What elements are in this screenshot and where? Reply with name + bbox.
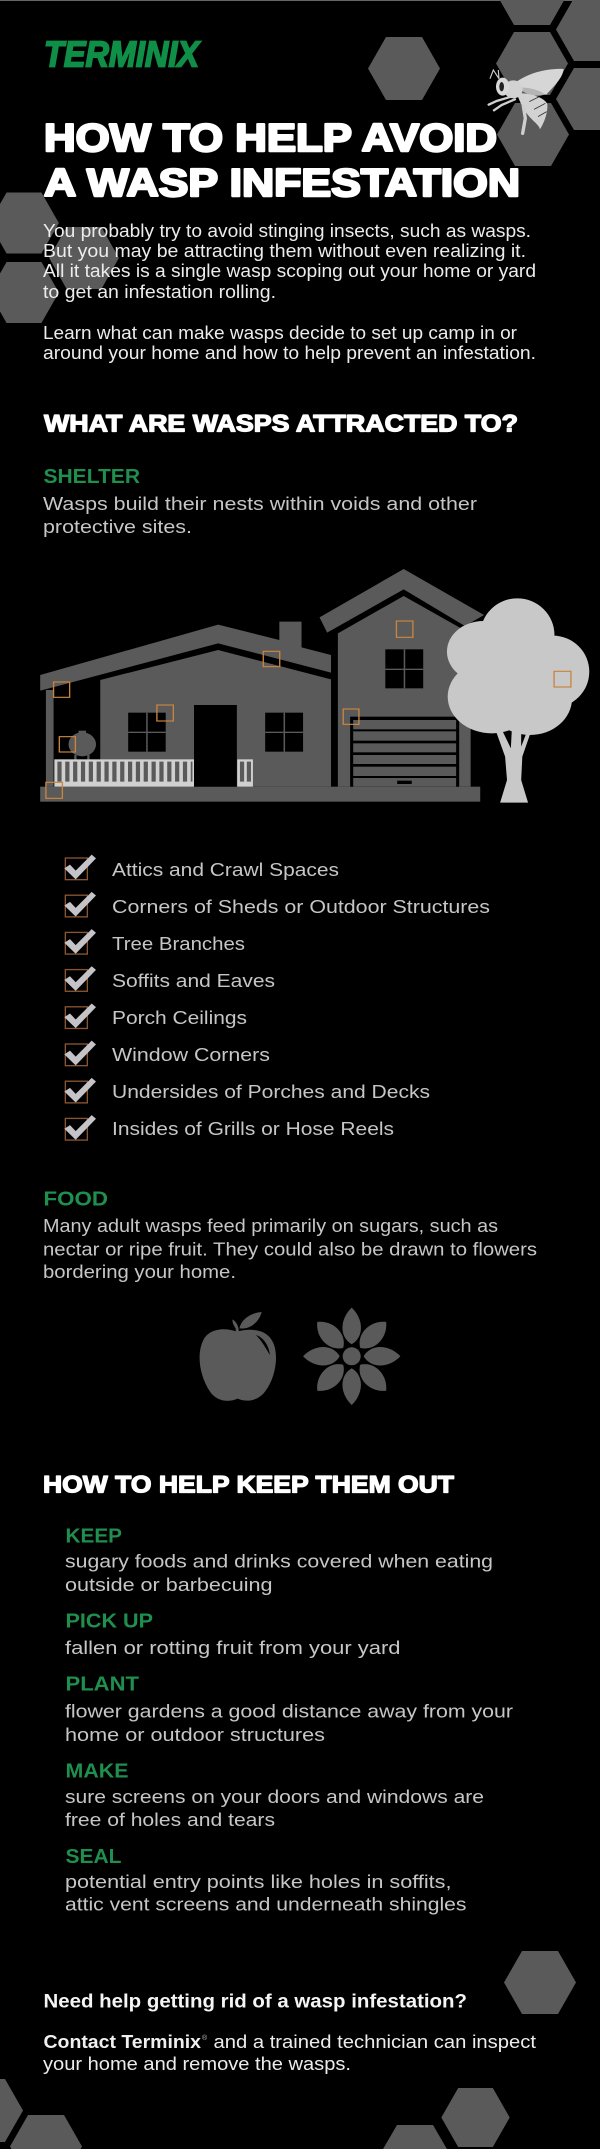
- tip: make: MAKE: [66, 1760, 128, 1782]
- check item: attics: [64, 855, 339, 880]
- check item: window corners: [64, 1041, 270, 1066]
- tip: keep: KEEP: [66, 1526, 122, 1548]
- check item: undersides: Undersides of Porches and Decks: [112, 1081, 430, 1102]
- tip: make: [65, 1760, 484, 1830]
- check item: window corners: Window Corners: [112, 1044, 270, 1065]
- shelter text: protective sites.: [43, 516, 192, 537]
- icon: grill: [68, 731, 96, 760]
- intro text: You probably try to avoid stinging insects, such as wasps.: [43, 221, 531, 241]
- check item: grills: Insides of Grills or Hose Reels: [112, 1118, 394, 1139]
- cta text: Contact Terminix: [44, 2032, 201, 2052]
- food text: [43, 1215, 537, 1282]
- check item: soffits: [64, 966, 275, 991]
- shelter text: Wasps build their nests within voids and other: [43, 493, 477, 514]
- tip: plant: [65, 1674, 513, 1745]
- tips list: [65, 1526, 513, 1914]
- heading: what are wasps attracted to: WHAT ARE WASPS ATTRACTED TO?: [44, 410, 518, 438]
- icon: wasp: [489, 69, 564, 133]
- tip: seal: attic vent screens and underneath shingles: [65, 1894, 466, 1914]
- subheading: shelter: SHELTER: [44, 466, 141, 488]
- icon: apple: [200, 1312, 276, 1401]
- check item: attics: Attics and Crawl Spaces: [112, 859, 339, 880]
- logo: Terminix: TERMINIX: [44, 34, 201, 74]
- check item: tree branches: [64, 929, 245, 954]
- tip: pick up: [65, 1610, 400, 1658]
- tip: keep: outside or barbecuing: [65, 1574, 272, 1595]
- honeycomb: footer right: [379, 1951, 576, 2149]
- tip: make: free of holes and tears: [65, 1809, 275, 1830]
- call to action: [43, 1992, 536, 2074]
- tip: make: sure screens on your doors and windows are: [65, 1786, 484, 1807]
- house: main building: [40, 622, 331, 787]
- intro text: All it takes is a single wasp scoping out your home or yard: [43, 261, 536, 281]
- tree: [447, 598, 589, 803]
- section: shelter: [43, 466, 477, 537]
- check item: undersides: [64, 1078, 430, 1103]
- check item: porch ceilings: [64, 1003, 247, 1028]
- tip: keep: sugary foods and drinks covered when eating: [65, 1550, 493, 1572]
- check item: sheds: Corners of Sheds or Outdoor Structures: [112, 896, 490, 917]
- porch railing: [54, 759, 253, 787]
- cta text: [43, 2032, 536, 2074]
- food text: nectar or ripe fruit. They could also be drawn to flowers: [43, 1238, 537, 1260]
- honeycomb: footer left: [0, 2079, 82, 2149]
- tip: seal: [65, 1846, 466, 1914]
- tip: pick up: fallen or rotting fruit from your yard: [65, 1637, 400, 1658]
- tip: keep: [65, 1526, 493, 1595]
- check item: porch ceilings: Porch Ceilings: [112, 1007, 247, 1028]
- intro text: [43, 221, 536, 363]
- heading: how to help keep them out: HOW TO HELP KEEP THEM OUT: [43, 1472, 454, 1498]
- shelter text: [43, 493, 477, 537]
- section: food: [43, 1188, 537, 1282]
- house: upper window: [385, 649, 423, 688]
- cta text: your home and remove the wasps.: [43, 2054, 351, 2074]
- house: windows and door: [128, 705, 303, 787]
- tip: seal: SEAL: [66, 1846, 122, 1868]
- illustration: house and tree: [40, 569, 589, 803]
- tip: plant: PLANT: [66, 1674, 139, 1696]
- check item: sheds: [64, 892, 490, 917]
- intro text: But you may be attracting them without even realizing it.: [43, 241, 526, 261]
- check item: soffits: Soffits and Eaves: [112, 970, 275, 991]
- intro text: around your home and how to help prevent an infestation.: [43, 343, 536, 363]
- food text: Many adult wasps feed primarily on sugars, such as: [43, 1215, 498, 1236]
- tip: plant: home or outdoor structures: [65, 1724, 325, 1745]
- honeycomb: top right: [368, 0, 600, 166]
- cta heading: Need help getting rid of a wasp infestation?: [44, 1992, 467, 2012]
- food text: bordering your home.: [43, 1261, 236, 1282]
- subheading: food: FOOD: [44, 1188, 108, 1210]
- title: [44, 117, 520, 205]
- checklist: nesting sites: [64, 855, 490, 1140]
- title: A WASP INFESTATION: [44, 162, 520, 205]
- cta text: and a trained technician can inspect: [214, 2032, 536, 2052]
- check item: tree branches: Tree Branches: [112, 933, 245, 954]
- tip: seal: potential entry points like holes in soffits,: [65, 1871, 452, 1892]
- house: slab: [40, 787, 480, 802]
- check item: grills: [64, 1115, 394, 1140]
- tip: plant: flower gardens a good distance away from your: [65, 1700, 513, 1722]
- orange nest-site markers: [46, 621, 571, 798]
- intro text: to get an infestation rolling.: [43, 282, 276, 302]
- honeycomb: left of intro: [0, 192, 120, 324]
- tip: pick up: PICK UP: [66, 1610, 153, 1632]
- title: HOW TO HELP AVOID: [44, 117, 497, 160]
- icon: flower: [303, 1308, 400, 1405]
- intro text: Learn what can make wasps decide to set up camp in or: [43, 323, 517, 343]
- house: garage door: [350, 717, 459, 787]
- cta text: ®: [202, 2034, 208, 2042]
- house: two storey section: [320, 569, 484, 787]
